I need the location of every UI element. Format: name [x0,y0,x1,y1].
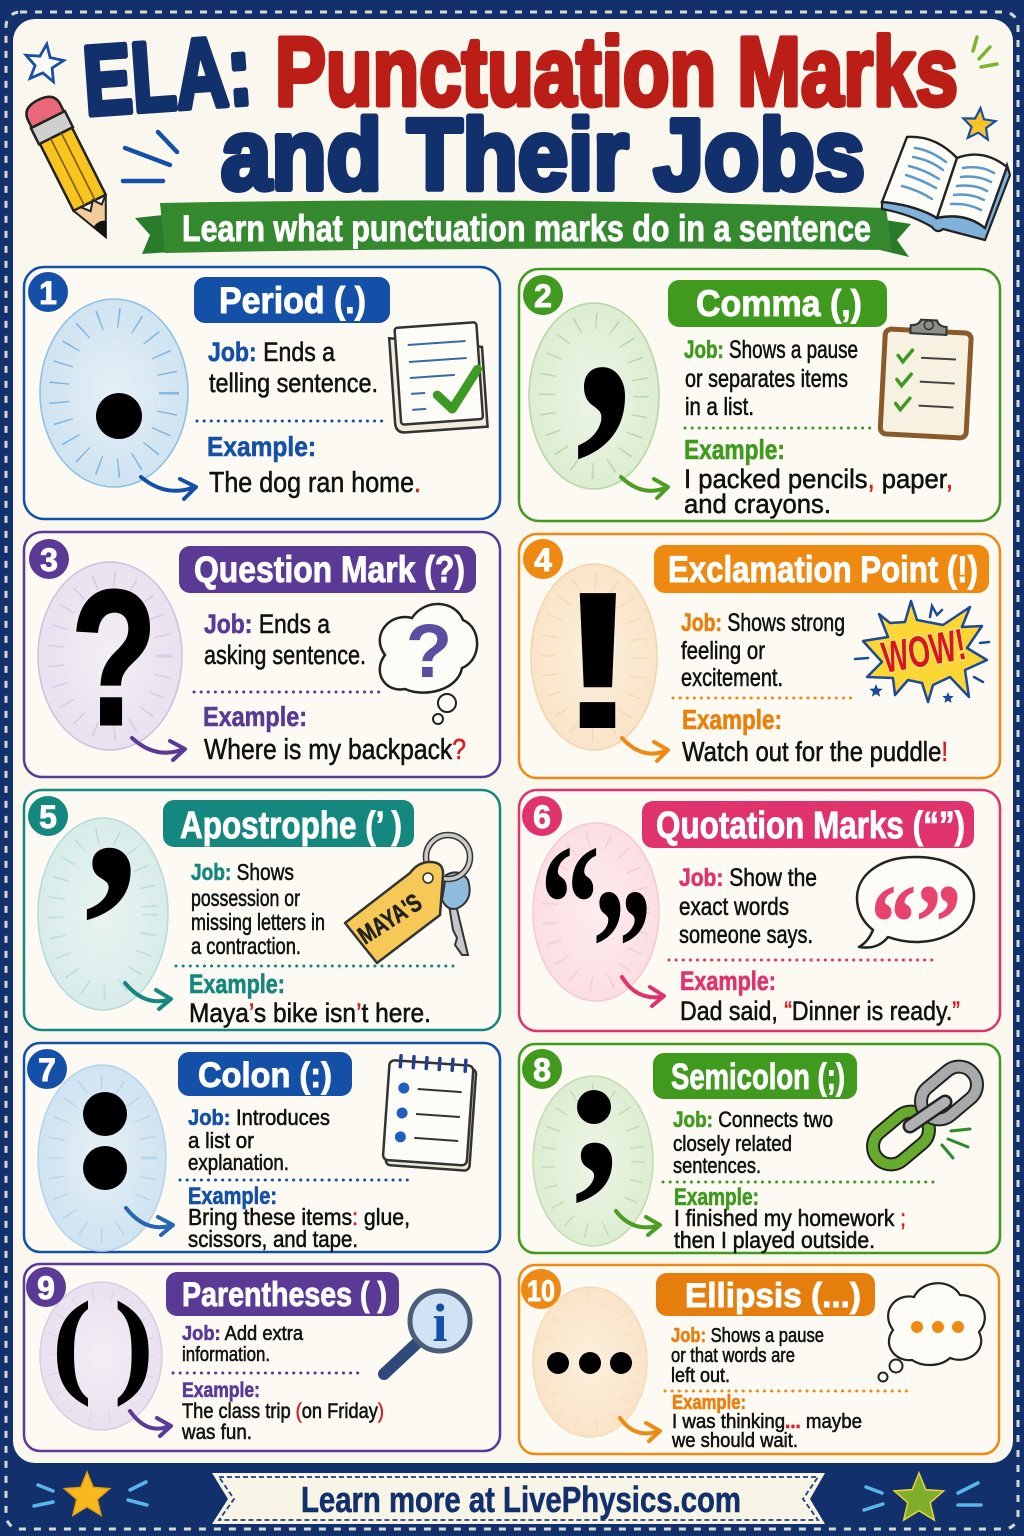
number badge [26,1267,66,1307]
job text: a list or [188,1128,254,1153]
example text [671,1392,862,1452]
job text: left out. [671,1365,730,1387]
job text: Job: Shows [191,859,294,885]
job text: Job: Add extra [182,1323,304,1345]
card frame [24,532,500,777]
heading pill: Quotation Marks (“”) [656,805,965,847]
example text [188,1183,410,1252]
icon: gold footer star [64,1472,110,1515]
job text [204,609,366,670]
number badge [523,539,563,579]
job text: explanation. [188,1150,289,1175]
job text: Job: Shows a pause [671,1325,824,1347]
icon: magnifying glass [384,1291,470,1374]
icon: green footer star [894,1473,944,1520]
footer banner [212,1473,825,1524]
heading pill: Period (.) [219,280,366,321]
panel: 6 quotation marks [519,790,1000,1042]
job text [208,337,378,398]
arrow [622,738,668,761]
heading pill: Comma (,) [696,283,862,324]
speech bubble with colon [38,1065,166,1251]
icon: thought cloud with dots [878,1283,985,1382]
example text: and crayons. [684,489,831,519]
heading pill: Colon (:) [198,1056,332,1095]
example text [207,431,421,499]
arrow [126,1208,173,1235]
number badge [523,275,563,315]
ribbon subtitle [135,200,911,257]
speech bubble with semicolon: , [574,995,619,1216]
number badge [522,796,562,836]
icon: WOW burst: WOW! [878,620,969,683]
icon: thought bubble with question mark: ? [406,609,452,694]
icon: green ticks [973,37,997,67]
arrow [132,738,185,760]
job text: possession or [191,885,300,911]
card frame [519,790,1000,1031]
panel: 5 apostrophe [24,669,500,1030]
icon: footer sparkle ticks [34,1482,981,1510]
card frame [519,534,1000,778]
example text: Example: [203,701,307,732]
card frame [24,267,500,519]
job text: or separates items [685,365,848,393]
example text [674,1184,906,1253]
example text: Example: [674,1184,759,1211]
number badge [28,796,68,836]
job text: Job: Introduces [188,1105,330,1130]
job text: information. [182,1344,270,1366]
panel: 8 semicolon [519,995,1000,1253]
icon: notepad [382,1055,477,1171]
job text: Job: Shows strong [681,609,845,637]
panel: 1 period [24,267,500,519]
job text [182,1323,304,1366]
speech bubble with exclamation point: ! [556,551,640,770]
icon: checked document [388,322,488,433]
example text: The dog ran home. [209,467,421,499]
card frame [519,1265,999,1454]
example text: Example: [680,966,776,996]
arrow [620,1418,660,1441]
example text: I was thinking... maybe [672,1411,862,1433]
speech bubble with semicolon [533,995,653,1246]
number badge: 2 [534,278,552,314]
heading pill: Question Mark (?) [194,549,465,590]
example text: scissors, and tape. [188,1226,358,1252]
title words: and Their Jobs: and Their Jobs [221,99,865,211]
arrow [125,983,171,1009]
number badge [29,539,69,579]
icon: gold star [962,107,997,140]
job text: someone says. [679,921,813,949]
number badge: 5 [39,799,57,835]
footer text: Learn more at LivePhysics.com [301,1479,741,1520]
icon: clipboard [880,318,972,438]
example text: Example: [207,431,316,462]
arrow [141,477,196,499]
speech bubble with parentheses: ( [53,1281,91,1406]
speech bubble with question mark: ? [71,550,157,765]
example text: Dad said, “Dinner is ready.” [680,996,960,1026]
example text: Example: [188,1183,277,1210]
speech bubble with quotation marks [533,810,659,1042]
icon: magnifying glass: i [432,1293,448,1353]
panel: 4 exclamation point [519,534,1000,778]
card frame [519,269,1000,521]
number badge: 6 [533,799,551,835]
number badge: 1 [39,275,57,311]
icon: left outlined star [23,42,66,83]
title word: ELA: ELA: [80,14,255,136]
arrow [621,477,668,498]
heading pill: Apostrophe (’ ) [180,805,402,847]
job text: in a list. [685,393,754,421]
arrow [130,1411,171,1436]
icon: blue ticks [123,132,177,181]
example text: Example: [182,1379,260,1402]
icon: thought bubble with question mark [380,604,477,724]
subtitle text: Learn what punctuation marks do in a sentence [182,208,871,249]
example text: I packed pencils, paper, [684,464,953,494]
job text [679,864,817,949]
heading pill: Semicolon (;) [671,1056,845,1097]
heading pill [653,1053,857,1099]
example text [203,701,466,766]
number badge: 9 [37,1270,55,1306]
example text: we should wait. [671,1430,798,1452]
icon: chain links [866,1059,984,1172]
job text: Job: Shows a pause [684,336,858,364]
job text: or that words are [671,1345,795,1367]
panel: 7 colon [24,1043,500,1252]
example text: Example: [682,704,782,735]
number badge: 3 [40,542,58,578]
job text: excitement. [681,664,783,692]
job text: telling sentence. [209,368,378,398]
job text: Job: Ends a [208,337,336,367]
speech bubble with exclamation point [531,551,657,770]
panel: 2 comma [519,140,1000,521]
example text [189,969,431,1028]
job text: sentences. [673,1153,761,1178]
job text: Job: Show the [679,864,817,892]
speech bubble with apostrophe: , [84,669,139,935]
arrow [616,1211,660,1235]
example text [181,1379,384,1444]
example text: I finished my homework ; [674,1205,906,1231]
job text: a contraction. [191,933,301,959]
job text: Job: Connects two [673,1107,833,1132]
job text [188,1105,330,1175]
example text [682,704,948,767]
number badge: 10 [527,1275,555,1308]
icon: WOW burst [855,601,989,703]
job text: closely related [673,1131,792,1156]
example text: Example: [684,434,785,465]
panel: 3 question mark [24,532,500,777]
speech bubble with ellipsis [533,1287,647,1437]
panel: 10 ellipsis [519,1265,999,1454]
job text: feeling or [681,637,765,665]
number badge [521,1269,561,1309]
arrow [622,977,664,1006]
example text: was fun. [181,1421,252,1444]
job text: exact words [679,893,789,921]
card frame [519,1044,1000,1253]
number badge [522,1049,562,1089]
speech bubble with parentheses [40,1281,162,1430]
speech bubble with comma: , [575,140,634,478]
icon: pencil [21,91,124,245]
speech bubble with parentheses: ) [115,1281,153,1406]
job text: missing letters in [191,909,325,935]
footer [34,1472,981,1524]
title [80,14,958,211]
example text: then I played outside. [674,1227,875,1253]
example text: Example: [189,969,285,999]
icon: speech bubble with quotes: “” [871,863,961,980]
number badge: 4 [534,542,552,578]
speech bubble with quotation marks: “ [540,810,600,998]
card frame [24,1043,500,1252]
icon: keychain tag [345,835,470,963]
job text [191,859,325,959]
example text: Bring these items: glue, [188,1204,410,1230]
job text [681,609,845,692]
example text: Where is my backpack? [204,734,466,766]
example text [684,434,953,519]
speech bubble with quotation marks: ” [592,854,652,1042]
example text: Maya’s bike isn’t here. [189,998,431,1028]
example text: Example: [672,1392,746,1414]
number badge [28,272,68,312]
speech bubble with period [40,299,188,487]
example text [680,966,960,1026]
job text [684,336,858,421]
job text: Job: Ends a [204,609,331,639]
number badge [27,1049,67,1089]
number badge: 8 [533,1052,551,1088]
job text: asking sentence. [204,640,366,670]
speech bubble with apostrophe [38,669,168,1010]
speech bubble with comma [529,140,659,489]
job text [671,1325,824,1387]
card frame [24,790,500,1030]
heading pill: Parentheses ( ) [182,1276,387,1314]
heading pill: Ellipsis (...) [685,1277,861,1315]
card frame [24,1264,500,1451]
icon: open book [882,137,1010,240]
example text: The class trip (on Friday) [182,1400,384,1423]
number badge: 7 [38,1052,56,1088]
panel: 9 parentheses [24,1264,500,1451]
keychain label: MAYA'S [353,888,427,950]
job text [673,1107,833,1178]
example text: Watch out for the puddle! [682,736,948,767]
